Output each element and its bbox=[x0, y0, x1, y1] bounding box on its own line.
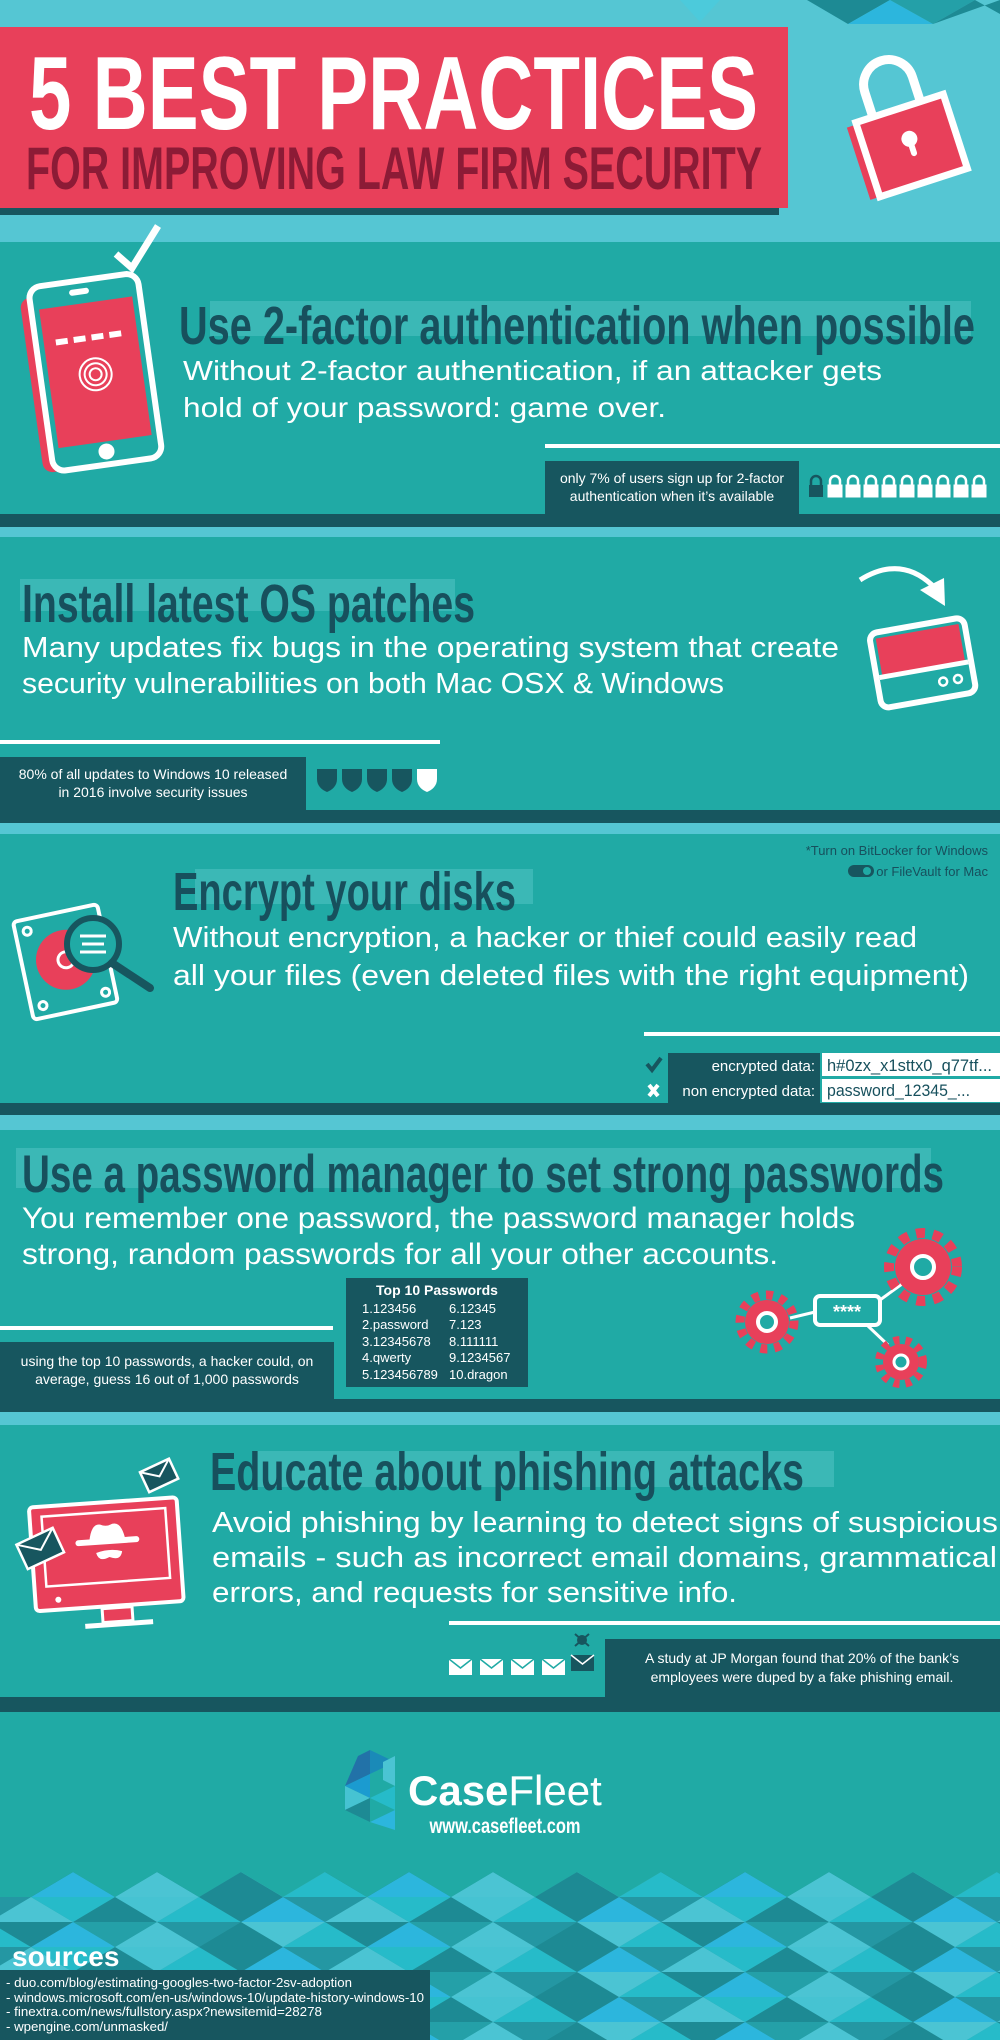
callout: top 10 stat: average, guess 16 out of 1,000 passwords bbox=[35, 1371, 299, 1387]
note: bitlocker: *Turn on BitLocker for Windows bbox=[806, 843, 988, 858]
icon: disk with magnifier bbox=[13, 904, 150, 1020]
top 10 passwords table: 4.qwerty bbox=[362, 1350, 412, 1365]
section 5: phishing bbox=[0, 1425, 1000, 1712]
section 4: password manager bbox=[0, 1130, 1000, 1425]
note: bitlocker bbox=[806, 843, 988, 879]
sources bbox=[0, 1941, 430, 2040]
callout: 7% stat bbox=[545, 461, 799, 514]
body text: security vulnerabilities on both Mac OSX & Windows bbox=[22, 668, 724, 700]
icon: envelopes bbox=[449, 1634, 594, 1675]
sources: - windows.microsoft.com/en-us/windows-10/update-history-windows-10 bbox=[6, 1990, 424, 2005]
heading band bbox=[255, 1451, 834, 1487]
body text: errors, and requests for sensitive info. bbox=[212, 1577, 737, 1609]
heading: Install latest OS patches bbox=[22, 574, 475, 634]
callout: JP Morgan stat bbox=[605, 1639, 1000, 1697]
top 10 passwords table: 10.dragon bbox=[449, 1367, 508, 1382]
heading band bbox=[16, 1148, 931, 1188]
callout: 7% stat: authentication when it’s available bbox=[570, 488, 774, 504]
callout: 80% stat: in 2016 involve security issues bbox=[58, 784, 248, 800]
triangle pattern bbox=[0, 1871, 1000, 2040]
callout: 80% stat bbox=[0, 757, 306, 810]
body text: Without 2-factor authentication, if an attacker gets bbox=[183, 355, 882, 386]
top 10 passwords table: 7.123 bbox=[449, 1317, 482, 1332]
body text bbox=[22, 1202, 855, 1271]
callout: JP Morgan stat: A study at JP Morgan found that 20% of the bank’s bbox=[645, 1650, 959, 1666]
callout: 80% stat: 80% of all updates to Windows 10 released bbox=[19, 766, 287, 782]
data comparison rows: h#0zx_x1sttx0_q77tf... bbox=[827, 1056, 992, 1075]
heading: Educate about phishing attacks bbox=[210, 1442, 804, 1502]
top 10 passwords table: 9.1234567 bbox=[449, 1350, 510, 1365]
sources: - wpengine.com/unmasked/ bbox=[6, 2019, 168, 2034]
body text: Many updates fix bugs in the operating system that create bbox=[22, 632, 839, 664]
body text: hold of your password: game over. bbox=[183, 392, 666, 423]
body text: emails - such as incorrect email domains, grammatical bbox=[212, 1542, 997, 1574]
body text: Without encryption, a hacker or thief could easily read bbox=[173, 922, 917, 954]
sources: - finextra.com/news/fullstory.aspx?newsitemid=28278 bbox=[6, 2004, 322, 2019]
top 10 passwords table: 6.12345 bbox=[449, 1301, 496, 1316]
body text bbox=[22, 632, 839, 700]
section 2: OS patches bbox=[0, 537, 1000, 834]
sources: - duo.com/blog/estimating-googles-two-factor-2sv-adoption bbox=[6, 1975, 352, 1990]
footer background bbox=[0, 1712, 1000, 2040]
title line 1: 5 BEST PRACTICES bbox=[29, 36, 758, 152]
top 10 passwords table: 2.password bbox=[362, 1317, 428, 1332]
logo: CaseFleet: CaseFleet bbox=[408, 1767, 602, 1814]
section 3: encrypt disks bbox=[0, 834, 1000, 1130]
data comparison rows: password_12345_... bbox=[827, 1081, 970, 1100]
callout: JP Morgan stat: employees were duped by a fake phishing email. bbox=[651, 1669, 953, 1685]
data comparison rows bbox=[647, 1053, 1000, 1103]
body text bbox=[183, 355, 882, 423]
icon: gears with password bbox=[740, 1233, 957, 1384]
top 10 passwords table bbox=[346, 1278, 528, 1387]
header background bbox=[0, 0, 1000, 242]
body text: You remember one password, the password manager holds bbox=[22, 1202, 855, 1235]
icon: padlock bbox=[830, 46, 967, 200]
section 1: 2-factor bbox=[0, 226, 1000, 537]
icon: curved arrow bbox=[860, 569, 945, 606]
body text: strong, random passwords for all your other accounts. bbox=[22, 1238, 778, 1271]
icon: monitor with hacker bbox=[16, 1459, 185, 1632]
heading band bbox=[210, 301, 971, 336]
sources: sources bbox=[12, 1941, 119, 1972]
callout: top 10 stat: using the top 10 passwords, a hacker could, on bbox=[21, 1353, 313, 1369]
body text: Avoid phishing by learning to detect signs of suspicious bbox=[212, 1507, 998, 1539]
icon: hard drive bbox=[869, 617, 977, 709]
top 10 passwords table: Top 10 Passwords bbox=[376, 1282, 498, 1298]
heading: Encrypt your disks bbox=[173, 862, 516, 922]
icon: phone with checkmark bbox=[18, 226, 163, 473]
callout: top 10 stat bbox=[0, 1342, 334, 1399]
heading band bbox=[195, 869, 533, 904]
icon: shields bbox=[317, 769, 437, 792]
top 10 passwords table: 3.12345678 bbox=[362, 1334, 431, 1349]
data comparison rows: non encrypted data: bbox=[682, 1083, 815, 1100]
heading band bbox=[20, 579, 455, 611]
top 10 passwords table: 5.123456789 bbox=[362, 1367, 438, 1382]
icon: gears with password: **** bbox=[833, 1302, 861, 1322]
logo: CaseFleet bbox=[345, 1750, 602, 1838]
body text bbox=[212, 1507, 998, 1609]
header corner triangles bbox=[680, 0, 1000, 24]
body text bbox=[173, 922, 969, 992]
icon: lock row bbox=[809, 476, 986, 497]
callout: 7% stat: only 7% of users sign up for 2-factor bbox=[560, 470, 784, 486]
top 10 passwords table: 1.123456 bbox=[362, 1301, 416, 1316]
data comparison rows: encrypted data: bbox=[712, 1058, 815, 1075]
title box bbox=[0, 27, 788, 215]
logo: CaseFleet: www.casefleet.com bbox=[429, 1815, 580, 1838]
note: bitlocker: or FileVault for Mac bbox=[876, 864, 988, 879]
body text: all your files (even deleted files with the right equipment) bbox=[173, 960, 969, 992]
top 10 passwords table: 8.111111 bbox=[449, 1334, 498, 1349]
